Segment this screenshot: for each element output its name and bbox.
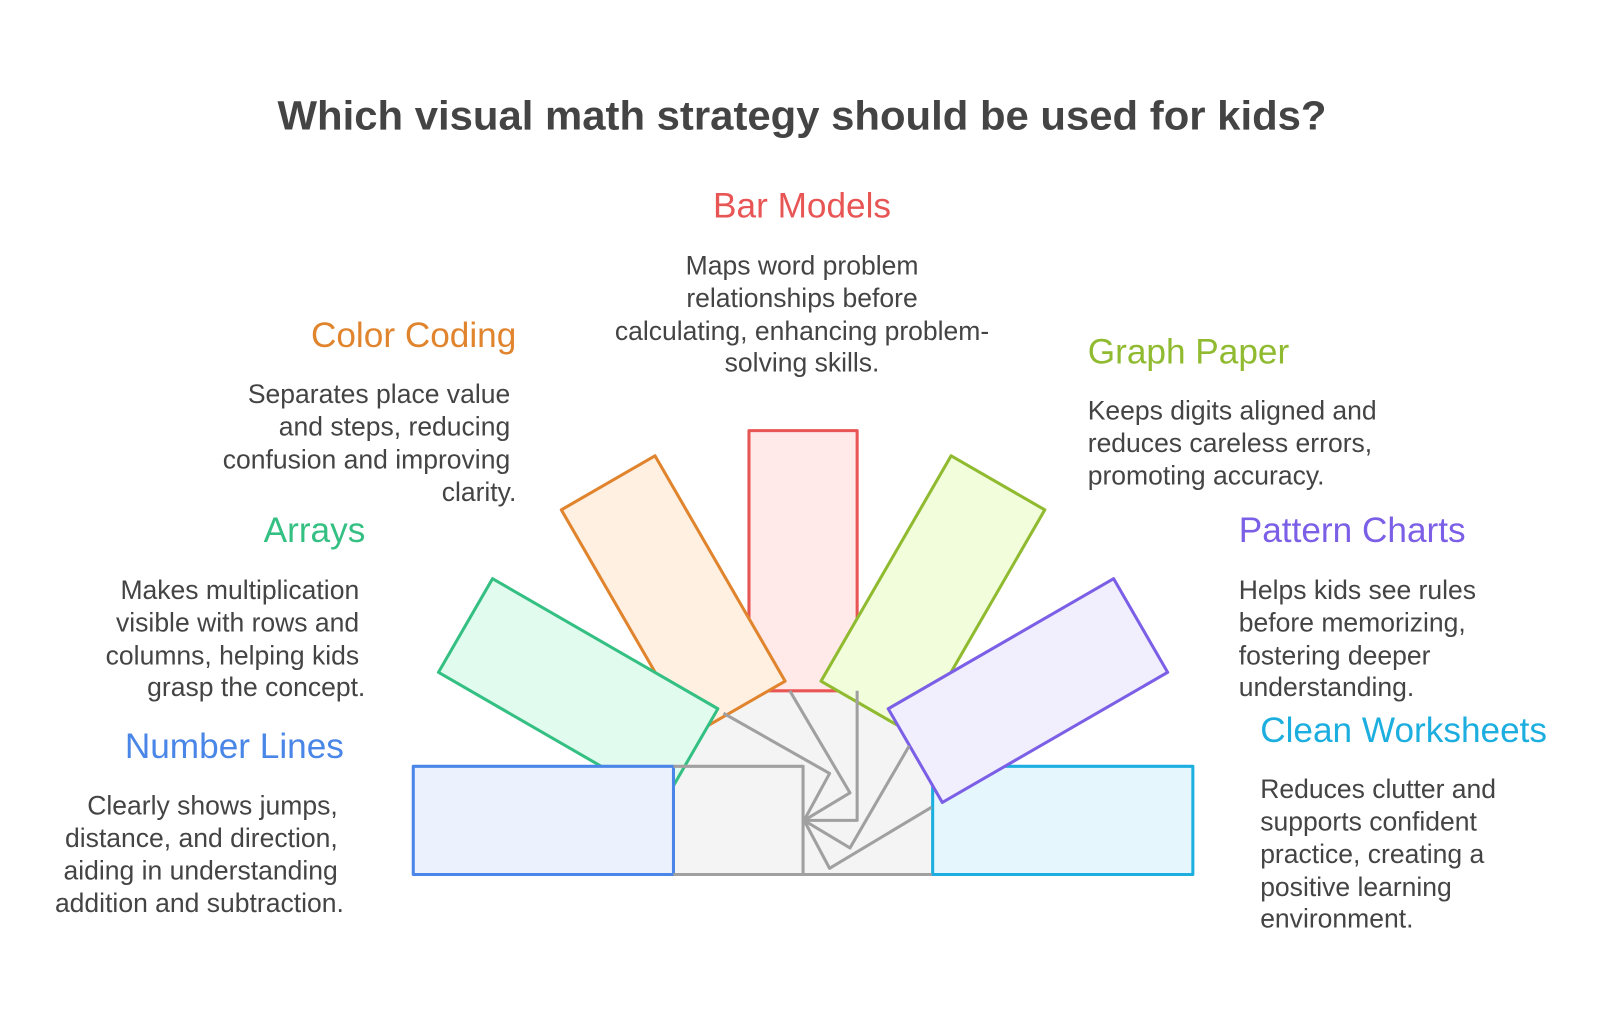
text: graph paper: promoting accuracy. [1088, 461, 1325, 491]
fan diagram [413, 431, 1193, 874]
text: number lines: aiding in understanding [64, 856, 338, 886]
strip: clean worksheets [933, 766, 1193, 874]
text: graph paper [1088, 332, 1377, 491]
gray hub [673, 673, 942, 874]
text: clean worksheets: practice, creating a [1260, 839, 1484, 869]
text: bar models: Maps word problem [686, 250, 918, 280]
text: arrays: Makes multiplication [120, 575, 359, 605]
strip: number lines [413, 766, 673, 874]
text: color coding: Color Coding [311, 316, 516, 355]
text: bar models: relationships before [686, 283, 918, 313]
text: clean worksheets: Clean Worksheets [1260, 711, 1547, 750]
text: number lines [55, 727, 344, 918]
text: arrays [106, 511, 365, 702]
text: pattern charts: Helps kids see rules [1239, 575, 1476, 605]
text: pattern charts: before memorizing, [1239, 608, 1466, 638]
text: bar models: solving skills. [725, 347, 879, 377]
strip: pattern charts [888, 579, 1168, 802]
text: color coding: clarity. [442, 477, 516, 507]
title: Which visual math strategy should be used for kids? [278, 93, 1327, 139]
text: number lines: Clearly shows jumps, [87, 790, 338, 820]
text: graph paper: Graph Paper [1088, 332, 1290, 371]
text: bar models [615, 186, 989, 377]
strip: arrays [438, 579, 718, 802]
text: clean worksheets: positive learning [1260, 872, 1452, 902]
text: bar models: calculating, enhancing problem- [615, 316, 989, 346]
text: arrays: grasp the concept. [147, 672, 365, 702]
text: clean worksheets: environment. [1260, 904, 1413, 934]
text: bar models: Bar Models [713, 186, 891, 225]
text: number lines: distance, and direction, [65, 823, 338, 853]
text: color coding: and steps, reducing [279, 412, 510, 442]
strip: graph paper [821, 456, 1045, 735]
text: graph paper: Keeps digits aligned and [1088, 395, 1377, 425]
text: number lines: Number Lines [125, 727, 344, 766]
text: color coding: Separates place value [248, 379, 510, 409]
text: pattern charts [1239, 511, 1476, 702]
text: clean worksheets: supports confident [1260, 807, 1478, 837]
text: number lines: addition and subtraction. [55, 888, 344, 918]
text: color coding [223, 316, 516, 507]
text: clean worksheets [1260, 711, 1547, 934]
strip: color coding [561, 456, 785, 735]
strip: bar models [749, 431, 857, 691]
text: clean worksheets: Reduces clutter and [1260, 774, 1496, 804]
text: pattern charts: fostering deeper [1239, 640, 1431, 670]
text: color coding: confusion and improving [223, 444, 510, 474]
text: pattern charts: Pattern Charts [1239, 511, 1466, 550]
text: pattern charts: understanding. [1239, 672, 1414, 702]
text: arrays: Arrays [264, 511, 365, 550]
text: arrays: visible with rows and [116, 608, 359, 638]
hub lines [673, 691, 932, 874]
text: arrays: columns, helping kids [106, 640, 359, 670]
text: graph paper: reduces careless errors, [1088, 428, 1372, 458]
